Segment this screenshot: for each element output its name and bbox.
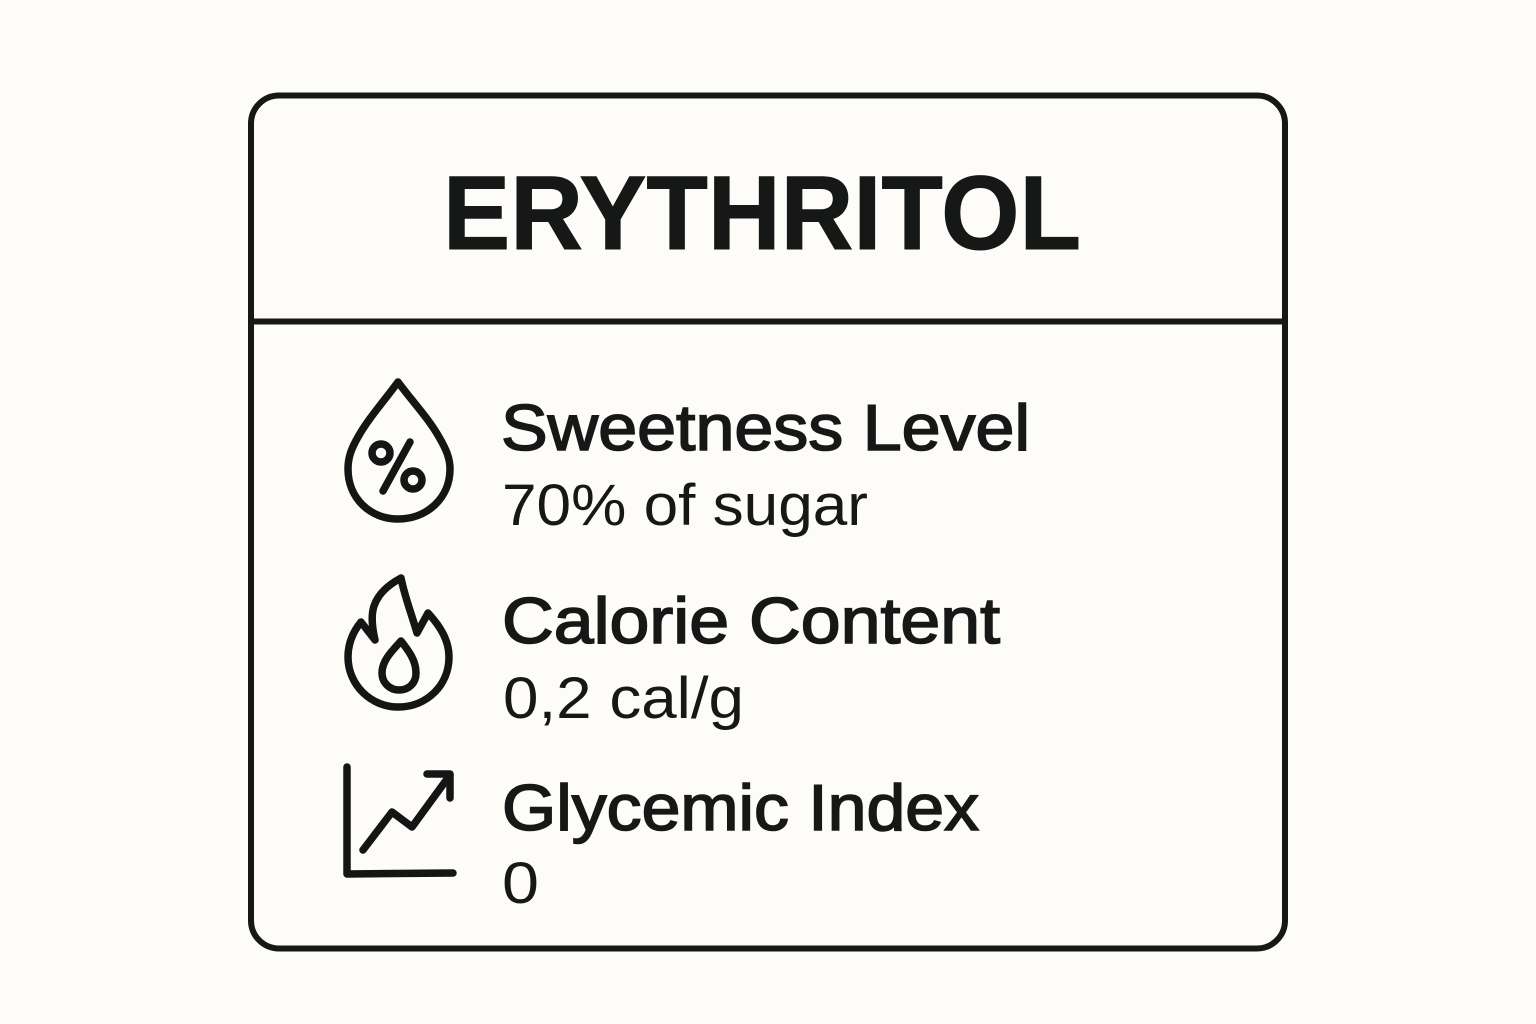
text: glycemic index: Glycemic Index <box>502 771 979 844</box>
panel: erythritol card <box>251 96 1285 948</box>
icon: water drop with percent <box>348 382 450 519</box>
text: calorie content <box>502 584 1000 731</box>
text: glycemic index: 0 <box>502 851 539 916</box>
title: ERYTHRITOL <box>443 155 1081 272</box>
text: glycemic index <box>502 771 979 916</box>
text: sweetness level <box>501 391 1030 538</box>
text: calorie content: Calorie Content <box>502 584 1000 657</box>
text: sweetness level: Sweetness Level <box>501 391 1030 464</box>
icon: rising line chart <box>347 767 453 874</box>
text: sweetness level: 70% of sugar <box>502 473 868 538</box>
icon: flame with drop <box>348 578 449 707</box>
text: calorie content: 0,2 cal/g <box>503 666 744 731</box>
